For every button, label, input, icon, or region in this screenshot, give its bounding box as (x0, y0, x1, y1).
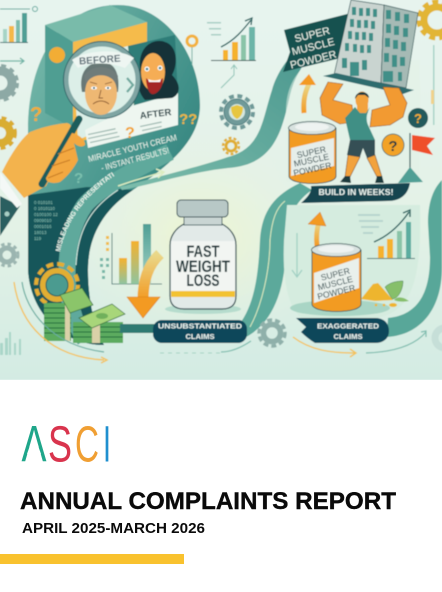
arrow: thin pale (221, 65, 237, 88)
question marks right of card: ?? (179, 111, 197, 128)
bottle body (170, 224, 236, 309)
logo: ASCI: A (22, 416, 46, 472)
head and neck (357, 104, 368, 113)
icon: powder pile with leaf (361, 281, 409, 307)
logo: ASCI (22, 416, 111, 472)
icon: gear right edge (435, 328, 442, 348)
arrow: thin down (292, 233, 302, 277)
bottle: fast weight loss: WEIGHT (176, 257, 230, 276)
speech bubble: dark question: ? (414, 111, 422, 126)
chevron (127, 78, 133, 92)
product box: miracle youth cream (45, 5, 179, 148)
icon: gear yellow left (0, 118, 15, 148)
chart: faded lower-left bars (0, 332, 21, 355)
label: unsubstantiated claims (120, 320, 247, 343)
label: unsubstantiated claims: UNSUBSTANTIATED (158, 322, 243, 330)
banner: super muscle powder: SUPER (293, 25, 332, 45)
arrow: orange up lower (308, 212, 326, 246)
banner: super muscle powder: MUSCLE (291, 36, 336, 58)
box front (73, 22, 147, 143)
accent bar (0, 554, 184, 564)
hand holding magnifier (0, 119, 85, 236)
box top (45, 5, 147, 42)
ribbon: right curve (387, 180, 442, 337)
lens (66, 44, 138, 116)
binary code text: 18013 (34, 230, 47, 235)
feet (340, 176, 384, 183)
slab (323, 73, 414, 94)
panel: misleading representation blob (28, 5, 200, 345)
after label: AFTER (139, 107, 172, 122)
icon: money stacks (44, 288, 125, 343)
binary code text: 0 010101 (34, 200, 53, 205)
neck (184, 216, 222, 225)
can: super muscle powder top (288, 122, 336, 184)
icon: small yellow gear (223, 138, 239, 154)
palm (2, 123, 72, 198)
logo: ASCI: S (48, 416, 72, 472)
left arm (320, 82, 354, 124)
can: super muscle powder bottom: POWDER (316, 283, 356, 302)
subtitle: date range: APRIL 2025-MARCH 2026 (22, 521, 205, 537)
thumb and fingers (46, 133, 85, 183)
panel: pale lower inset (284, 205, 420, 320)
can: super muscle powder bottom: SUPER (320, 266, 351, 283)
label: unsubstantiated claims: CLAIMS (185, 332, 215, 341)
chart: top-center bars (218, 18, 256, 61)
chart: top-left bars (0, 6, 38, 43)
label: exaggerated claims: EXAGGERATED (317, 322, 380, 330)
arrow: orange up top (299, 74, 316, 113)
arrow on ribbon (118, 169, 164, 186)
bottle: fast weight loss (165, 200, 241, 314)
icon: location pin (187, 36, 197, 65)
chart: center bars (100, 224, 162, 284)
question mark on ribbon: ? (74, 170, 83, 187)
banner: super muscle powder: POWDER (289, 48, 338, 72)
man: before (81, 62, 118, 115)
cap (177, 200, 228, 217)
woman: after (138, 41, 179, 100)
binary code text: 0 1010110 (34, 206, 55, 211)
panel: pale right inset (286, 60, 420, 182)
icon: question mark left: ? (30, 104, 42, 126)
cuff (0, 172, 22, 208)
binary code text: 119 (34, 236, 42, 241)
question mark on box: ? (125, 125, 135, 142)
title: ANNUAL COMPLAINTS REPORT (20, 488, 396, 515)
banner: super muscle powder (283, 13, 351, 72)
illustration background (0, 0, 442, 380)
icon: gear grey left (0, 66, 17, 100)
before label: BEFORE (79, 54, 121, 67)
text: miracle youth cream: MIRACLE YOUTH CREAM (87, 132, 178, 164)
flag with arrow (398, 133, 435, 183)
can: super muscle powder top: POWDER (292, 160, 332, 178)
speech bubble: orange question: ? (388, 138, 398, 155)
windows (342, 7, 409, 82)
arrows: lower-left swoosh (14, 282, 107, 363)
binary code text: 0001016 (34, 224, 52, 229)
label band (171, 291, 235, 297)
text: small lines top center (207, 22, 221, 61)
right arm (370, 87, 407, 127)
ribbon: upper S curve (120, 15, 352, 190)
building (323, 0, 418, 94)
chart: right bars (358, 210, 415, 259)
icon: gear grey bottom (259, 320, 285, 346)
text: misleading representation (60, 175, 116, 252)
sleeve (0, 196, 20, 236)
handle (42, 119, 79, 184)
logo: ASCI: I (103, 416, 111, 472)
magnifying glass (64, 42, 140, 118)
bottle: fast weight loss: FAST (186, 242, 220, 261)
arrow: left thin (0, 58, 24, 64)
icon: large yellow gear top right (419, 2, 442, 38)
arrow: large orange down (127, 254, 160, 318)
box left side (45, 25, 73, 128)
illustration (0, 0, 442, 380)
label: exaggerated claims: CLAIMS (333, 332, 363, 341)
after label (134, 102, 178, 122)
logo: ASCI: C (75, 416, 99, 472)
icon: shield gear (221, 96, 253, 128)
white lower panel (0, 380, 442, 592)
arrows: ribbon bottom (160, 201, 426, 357)
binary code text: 0100100 12 (34, 212, 58, 217)
can: super muscle powder top: MUSCLE (293, 151, 330, 169)
text: miracle youth cream (87, 132, 178, 173)
can: super muscle powder top: SUPER (296, 144, 327, 160)
speech bubble: orange question (382, 134, 404, 156)
icon: gear yellow with teal core (36, 264, 78, 306)
binary code text: 0909010 (34, 218, 52, 223)
speech bubble: dark question (408, 108, 428, 128)
ribbon: lower S curve (222, 183, 312, 340)
bottle: fast weight loss: LOSS (186, 271, 220, 290)
can: super muscle powder bottom (290, 244, 390, 316)
legs (345, 155, 382, 177)
binary code text (34, 200, 58, 241)
label: exaggerated claims (296, 318, 389, 343)
torso tank (345, 107, 375, 140)
strongman (320, 82, 407, 183)
label: build in weeks: BUILD IN WEEKS! (318, 188, 394, 197)
small print lines (88, 121, 162, 143)
decorative side meter (431, 45, 434, 125)
can: super muscle powder bottom: MUSCLE (317, 274, 354, 292)
shorts (347, 140, 375, 158)
text: miracle youth cream: - INSTANT RESULTS! (100, 145, 170, 173)
icon: gear grey lower left (0, 244, 18, 266)
label: build in weeks (301, 183, 410, 203)
